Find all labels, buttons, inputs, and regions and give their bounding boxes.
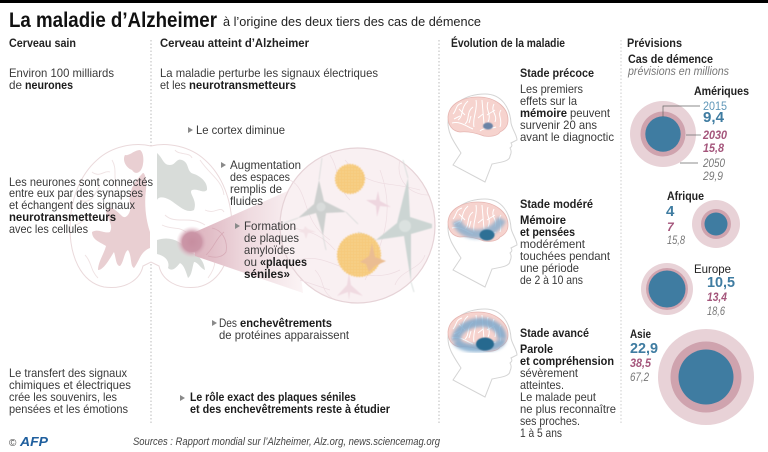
chart: Amériques: 2030 bbox=[702, 128, 727, 142]
column: Alzheimer brain: des espaces bbox=[230, 170, 290, 184]
column: Alzheimer brain: et les bbox=[160, 78, 186, 92]
text: early stage: avant le diagnoctic bbox=[520, 130, 614, 144]
icon: head moderate stage bbox=[448, 199, 517, 287]
brain detail inside cone bbox=[206, 228, 226, 257]
chart: Amériques: 29,9 bbox=[702, 169, 723, 183]
chart: Amériques: 9,4 bbox=[703, 109, 725, 126]
column: healthy brain: de bbox=[9, 78, 22, 92]
column: healthy brain: neurotransmetteurs bbox=[9, 210, 116, 224]
column: healthy brain: Le transfert des signaux bbox=[9, 366, 127, 380]
column: forecasts heading: Prévisions bbox=[627, 36, 682, 50]
chart: Amériques bbox=[630, 84, 749, 183]
column: healthy brain: chimiques et électriques bbox=[9, 378, 131, 392]
column: forecasts heading bbox=[627, 36, 729, 78]
text: moderate stage: touchées pendant bbox=[520, 249, 611, 263]
column: forecasts heading: Cas de démence bbox=[628, 52, 713, 66]
text: advanced stage: Le malade peut bbox=[520, 390, 597, 404]
sources: Sources : Rapport mondial sur l’Alzheimer, Alz.org, news.sciencemag.org bbox=[133, 436, 441, 448]
text: advanced stage: ne plus reconnaître bbox=[520, 402, 616, 416]
chart: Asie: 22,9 bbox=[630, 340, 658, 357]
top bar bbox=[0, 0, 768, 3]
plaque large bbox=[338, 234, 380, 276]
chart: Europe: Europe bbox=[694, 262, 731, 276]
title bbox=[9, 9, 481, 32]
chart: Asie: 38,5 bbox=[630, 356, 651, 370]
column: Alzheimer brain: neurotransmetteurs bbox=[189, 78, 296, 92]
column: healthy brain: entre eux par des synapses bbox=[9, 186, 143, 200]
chart: Amériques: 15,8 bbox=[703, 141, 724, 155]
text: advanced stage: sévèrement bbox=[520, 366, 579, 380]
chart: Amériques: 2050 bbox=[702, 156, 725, 170]
magnified circle with neurons and plaques bbox=[280, 148, 435, 303]
column: healthy brain: crée les souvenirs, les bbox=[9, 390, 117, 404]
text: early stage: mémoire bbox=[520, 106, 567, 120]
chart: Amériques: Amériques bbox=[694, 84, 749, 98]
column: healthy brain: Cerveau sain bbox=[9, 36, 76, 50]
column: healthy brain: et échangent des signaux bbox=[9, 198, 135, 212]
column: Alzheimer brain bbox=[160, 36, 390, 416]
pink neurons bbox=[298, 191, 391, 300]
text: advanced stage: Stade avancé bbox=[520, 326, 589, 340]
AFP logo bbox=[9, 434, 48, 449]
column: healthy brain: Les neurones sont connectés bbox=[9, 175, 153, 189]
text: early stage: survenir 20 ans bbox=[520, 118, 597, 132]
text: advanced stage: 1 à 5 ans bbox=[520, 426, 562, 440]
column: Alzheimer brain: remplis de bbox=[230, 182, 282, 196]
spot of damage bbox=[176, 226, 208, 258]
column: Alzheimer brain: «plaques bbox=[260, 255, 307, 269]
text: moderate stage: une période bbox=[520, 261, 579, 275]
column: forecasts heading: prévisions en millions bbox=[627, 64, 729, 78]
text: early stage: Les premiers bbox=[520, 82, 583, 96]
column: evolution heading: Évolution de la maladie bbox=[451, 35, 565, 50]
column: Alzheimer brain: Augmentation bbox=[230, 158, 301, 172]
diseased white matter bbox=[157, 153, 207, 211]
text: moderate stage bbox=[520, 197, 611, 287]
column: Alzheimer brain: de plaques bbox=[244, 231, 299, 245]
chart: Asie: Asie bbox=[630, 327, 651, 341]
icon: head early stage bbox=[448, 94, 517, 182]
column: healthy brain: neurones bbox=[25, 78, 73, 92]
chart: Europe: 13,4 bbox=[707, 290, 727, 304]
text: early stage: peuvent bbox=[570, 106, 611, 120]
text: advanced stage: et compréhension bbox=[520, 354, 614, 368]
text: moderate stage: Mémoire bbox=[520, 213, 566, 227]
text: advanced stage bbox=[520, 326, 616, 440]
column: Alzheimer brain: Le cortex diminue bbox=[196, 123, 285, 137]
chart: Amériques: 2015 bbox=[703, 99, 727, 113]
AFP logo: AFP bbox=[19, 434, 48, 449]
chart: Asie: 67,2 bbox=[630, 370, 649, 384]
column: Alzheimer brain: La maladie perturbe les signaux électriques bbox=[160, 66, 378, 80]
chart: Afrique: 7 bbox=[667, 220, 675, 234]
chart: Europe: 18,6 bbox=[707, 304, 725, 318]
chart: Europe: 10,5 bbox=[707, 274, 735, 291]
column: Alzheimer brain: amyloïdes bbox=[244, 243, 295, 257]
text: moderate stage: Stade modéré bbox=[520, 197, 593, 211]
column: Alzheimer brain: de protéines apparaissent bbox=[219, 328, 350, 342]
column: Alzheimer brain: ou bbox=[244, 255, 257, 269]
column: healthy brain: Environ 100 milliards bbox=[9, 66, 114, 80]
column: healthy brain: avec les cellules bbox=[9, 222, 88, 236]
title: à l’origine des deux tiers des cas de démence bbox=[223, 14, 481, 29]
column: Alzheimer brain: Formation bbox=[244, 219, 296, 233]
chart: Afrique bbox=[666, 189, 740, 248]
neuron grey right bbox=[358, 160, 432, 292]
column: Alzheimer brain: fluides bbox=[230, 194, 263, 208]
AFP logo: © bbox=[9, 438, 17, 449]
icon: head advanced stage bbox=[448, 309, 517, 397]
column: Alzheimer brain: et des enchevêtrements reste à étudier bbox=[190, 402, 390, 416]
chart: Asie bbox=[630, 327, 754, 425]
chart: Afrique: 4 bbox=[666, 203, 675, 220]
text: moderate stage: modérément bbox=[520, 237, 586, 251]
column: Alzheimer brain: Des bbox=[219, 316, 237, 330]
text: early stage: effets sur la bbox=[520, 94, 577, 108]
neuron grey left bbox=[284, 158, 358, 250]
column: healthy brain bbox=[9, 36, 153, 416]
column: healthy brain: pensées et les émotions bbox=[9, 402, 128, 416]
magnification cone bbox=[195, 190, 303, 293]
text: advanced stage: Parole bbox=[520, 342, 553, 356]
text: early stage: Stade précoce bbox=[520, 66, 594, 80]
text: early stage bbox=[520, 66, 614, 144]
chart: Afrique: 15,8 bbox=[667, 233, 685, 247]
chart: Europe bbox=[641, 262, 735, 318]
column: Alzheimer brain: enchevêtrements bbox=[240, 316, 332, 330]
column: Alzheimer brain: Le rôle exact des plaques séniles bbox=[190, 390, 356, 404]
text: moderate stage: de 2 à 10 ans bbox=[520, 273, 583, 287]
text: advanced stage: atteintes. bbox=[520, 378, 564, 392]
column: Alzheimer brain: séniles» bbox=[244, 267, 290, 281]
plaque small bbox=[336, 164, 364, 194]
title: La maladie d’Alzheimer bbox=[9, 9, 217, 32]
chart: Afrique: Afrique bbox=[667, 189, 704, 203]
healthy white matter bbox=[124, 150, 143, 173]
text: moderate stage: et pensées bbox=[520, 225, 575, 239]
text: advanced stage: ses proches. bbox=[520, 414, 580, 428]
illustration: cross-section of brain bbox=[70, 145, 232, 288]
column: Alzheimer brain: Cerveau atteint d’Alzheimer bbox=[160, 36, 309, 50]
